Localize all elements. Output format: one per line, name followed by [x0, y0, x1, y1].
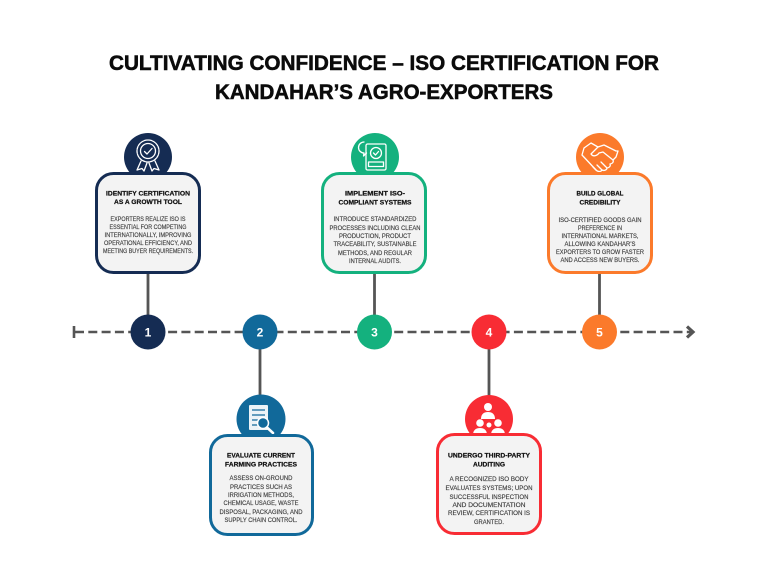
icon: auditors team	[465, 395, 513, 443]
connector stems	[148, 272, 600, 398]
card body text	[220, 475, 303, 524]
card body text: EXPORTERS REALIZE ISO IS	[110, 216, 186, 223]
step 1 node: 1	[145, 325, 152, 339]
card heading: UNDERGO THIRD-PARTY	[448, 452, 531, 460]
step 3 node: 3	[371, 325, 378, 339]
card body text: CHEMICAL USAGE, WASTE	[224, 500, 298, 507]
step 3 node	[357, 314, 392, 350]
card body text: EVALUATES SYSTEMS; UPON	[446, 485, 532, 492]
panel: build global credibility	[548, 133, 652, 272]
card heading: COMPLIANT SYSTEMS	[338, 200, 412, 206]
card body text: INTERNATIONAL MARKETS,	[562, 233, 639, 240]
card	[96, 174, 200, 272]
card body text: EXPORTERS TO GROW FASTER	[556, 249, 645, 256]
card body text: INTERNATIONALLY, IMPROVING	[104, 232, 192, 239]
step 4 node	[472, 314, 506, 350]
card body text: ALLOWING KANDAHAR’S	[564, 241, 636, 248]
icon: checklist with magnifier	[236, 394, 286, 444]
step 4 node: 4	[486, 325, 493, 339]
card heading: IDENTIFY CERTIFICATION	[106, 190, 190, 198]
card heading	[448, 452, 531, 468]
card body text: INTRODUCE STANDARDIZED	[334, 216, 417, 223]
card body text	[446, 476, 532, 526]
card body text: PREFERENCE IN	[578, 225, 622, 232]
card	[210, 436, 312, 534]
card body text: MEETING BUYER REQUIREMENTS.	[103, 248, 193, 255]
card body text: SUPPLY CHAIN CONTROL.	[224, 517, 298, 524]
card heading	[106, 190, 190, 206]
panel: identify certification	[96, 133, 200, 272]
card body text: PRACTICES SUCH AS	[230, 484, 292, 491]
card body text: PROCESSES INCLUDING CLEAN	[330, 225, 420, 232]
card body text: ASSESS ON-GROUND	[230, 475, 293, 482]
card heading	[225, 452, 298, 468]
card body text: PRODUCTION, PRODUCT	[339, 233, 411, 240]
card heading: CREDIBILITY	[580, 200, 621, 206]
card	[438, 434, 540, 534]
card body text: METHODS, AND REGULAR	[338, 250, 413, 257]
card body text: DISPOSAL, PACKAGING, AND	[220, 509, 303, 516]
step 1 node	[130, 314, 166, 350]
title	[109, 52, 659, 104]
panel: implement iso-compliant systems	[322, 133, 426, 272]
icon: compliance document	[351, 133, 399, 181]
card heading: FARMING PRACTICES	[225, 462, 298, 468]
card heading: EVALUATE CURRENT	[227, 452, 295, 460]
timeline arrow	[74, 326, 693, 338]
step 5 node: 5	[596, 325, 603, 339]
card heading: AS A GROWTH TOOL	[114, 199, 182, 206]
card body text: AND ACCESS NEW BUYERS.	[560, 257, 640, 264]
card body text	[103, 216, 193, 255]
card heading: IMPLEMENT ISO-	[345, 190, 405, 198]
title: CULTIVATING CONFIDENCE – ISO CERTIFICATION FOR	[109, 52, 659, 75]
card body text: GRANTED.	[474, 519, 504, 526]
icon: handshake	[576, 133, 624, 181]
card body text: ISO-CERTIFIED GOODS GAIN	[558, 217, 642, 224]
panel: undergo third-party auditing	[438, 395, 540, 534]
title: KANDAHAR’S AGRO-EXPORTERS	[215, 81, 553, 104]
card body text: AND DOCUMENTATION	[452, 502, 526, 509]
card body text: ESSENTIAL FOR COMPETING	[110, 224, 187, 231]
card heading	[576, 190, 624, 206]
card heading: BUILD GLOBAL	[576, 190, 624, 198]
card body text: A RECOGNIZED ISO BODY	[450, 476, 528, 483]
card	[322, 174, 426, 272]
card body text: INTERNAL AUDITS.	[349, 258, 401, 265]
card body text: TRACEABILITY, SUSTAINABLE	[334, 241, 416, 248]
icon: certificate badge	[124, 133, 172, 181]
step 2 node: 2	[257, 325, 264, 339]
card body text	[330, 216, 420, 265]
card body text	[556, 217, 645, 264]
card heading	[338, 190, 412, 206]
panel: evaluate current farming practices	[210, 394, 312, 534]
card heading: AUDITING	[473, 462, 505, 468]
card body text: SUCCESSFUL INSPECTION	[450, 494, 528, 501]
card	[548, 174, 652, 272]
card body text: OPERATIONAL EFFICIENCY, AND	[104, 240, 193, 247]
card body text: REVIEW, CERTIFICATION IS	[448, 510, 530, 517]
card body text: IRRIGATION METHODS,	[228, 492, 294, 499]
step 2 node	[242, 314, 278, 350]
step 5 node	[582, 314, 617, 350]
